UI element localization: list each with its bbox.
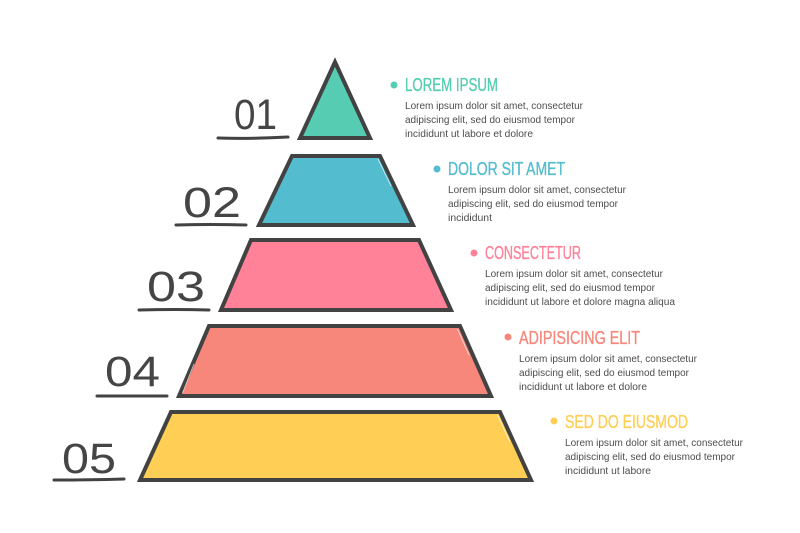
text block 5 [550, 412, 744, 477]
number 01 [218, 91, 288, 139]
text block 4: incididunt ut labore et dolore [519, 382, 647, 393]
text block 2: adipiscing elit, sed do eiusmod tempor [448, 199, 619, 210]
number 02 [176, 179, 246, 227]
text block 4: ADIPISICING ELIT [519, 328, 640, 348]
number 03: 03 [147, 263, 205, 311]
text block 1: Lorem ipsum dolor sit amet, consectetur [405, 101, 584, 112]
text block 2: Lorem ipsum dolor sit amet, consectetur [448, 185, 627, 196]
text block 5: adipiscing elit, sed do eiusmod tempor [565, 452, 736, 463]
text block 5: incididunt ut labore [565, 466, 651, 477]
number 02: 02 [183, 179, 241, 227]
number 05 [54, 435, 124, 483]
text block 1: incididunt ut labore et dolore [405, 129, 533, 140]
text block 2: incididunt [448, 213, 492, 224]
text block 4: Lorem ipsum dolor sit amet, consectetur [519, 354, 698, 365]
pyramid level 1 [300, 62, 370, 138]
text block 5: SED DO EIUSMOD [565, 412, 688, 432]
number 03 [139, 263, 209, 311]
pyramid level 5 [140, 412, 531, 480]
pyramid level 4 [179, 326, 491, 396]
text block 2: DOLOR SIT AMET [448, 159, 565, 179]
text block 3: incididunt ut labore et dolore magna aliqua [485, 297, 675, 308]
number 05: 05 [62, 435, 116, 483]
text block 1 [390, 75, 584, 140]
number 01: 01 [234, 91, 277, 139]
text block 2 [434, 159, 627, 224]
number 04 [97, 348, 167, 396]
text block 1: adipiscing elit, sed do eiusmod tempor [405, 115, 576, 126]
text block 3 [470, 243, 675, 308]
text block 3: Lorem ipsum dolor sit amet, consectetur [485, 269, 664, 280]
text block 3: adipiscing elit, sed do eiusmod tempor [485, 283, 656, 294]
text block 4: adipiscing elit, sed do eiusmod tempor [519, 368, 690, 379]
text block 4 [504, 328, 698, 393]
text block 5: Lorem ipsum dolor sit amet, consectetur [565, 438, 744, 449]
pyramid level 2 [259, 156, 413, 225]
text block 3: CONSECTETUR [485, 243, 581, 263]
text block 1: LOREM IPSUM [405, 75, 498, 95]
pyramid level 3 [221, 240, 451, 310]
number 04: 04 [105, 348, 160, 396]
